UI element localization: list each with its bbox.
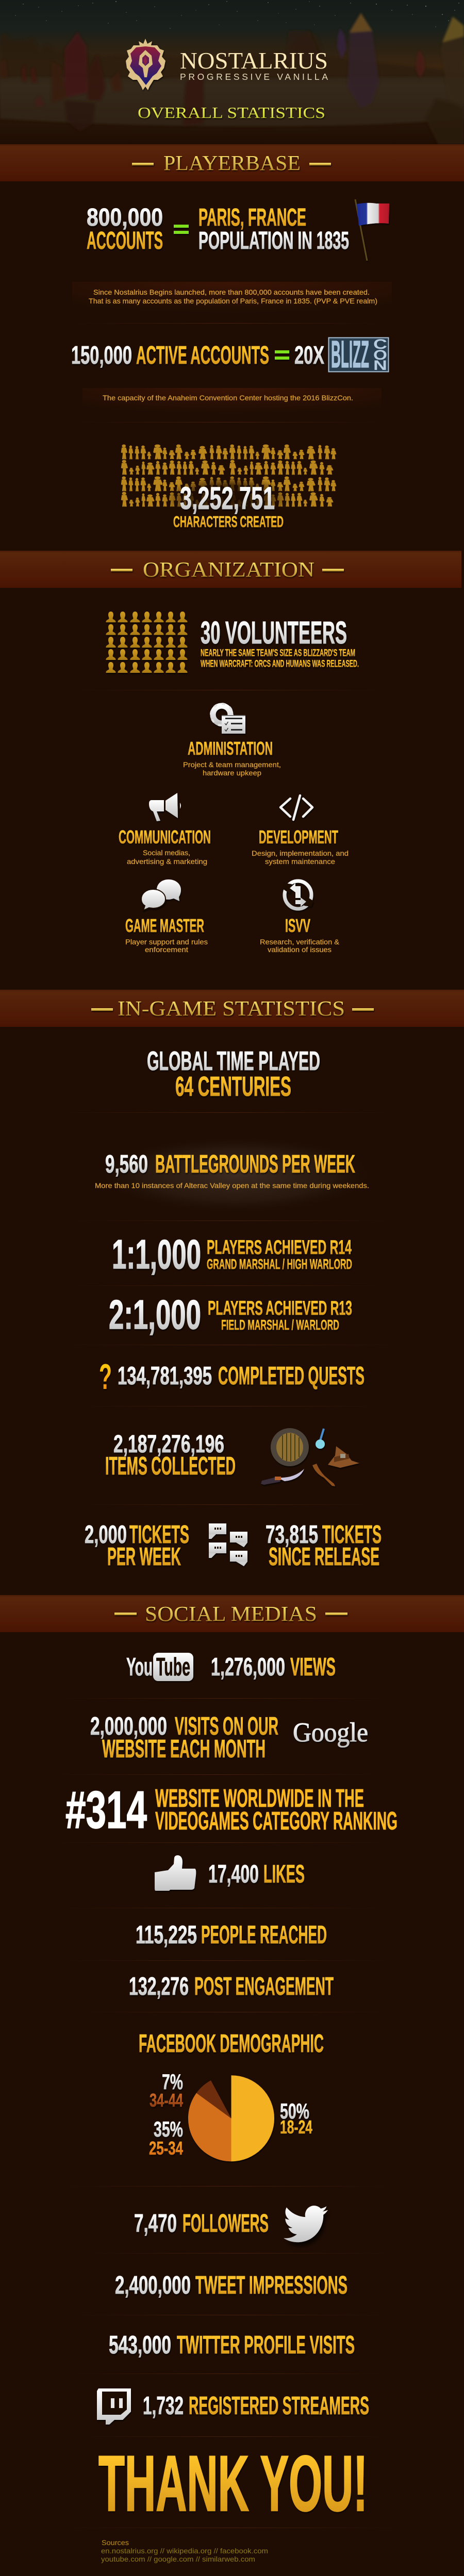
stat: registered streamers bbox=[143, 2392, 369, 2420]
icon: blizzcon logo: BLIZZ bbox=[331, 333, 369, 376]
legend: 18-24 bbox=[280, 2099, 312, 2138]
stat: twitter profile visits: 543,000 bbox=[109, 2331, 171, 2359]
text block: sources: youtube.com // google.com // similarweb.com bbox=[101, 2555, 255, 2563]
icon: quest mark: ? bbox=[99, 1357, 112, 1397]
logo: horde shield bbox=[126, 39, 165, 90]
legend: 34-44: 34-44 bbox=[150, 2090, 183, 2111]
icon: character silhouettes bbox=[121, 445, 336, 521]
role: administration bbox=[183, 704, 281, 777]
role: isvv: Research, verification & bbox=[260, 938, 340, 946]
stat: global time played: GLOBAL TIME PLAYED bbox=[147, 1046, 320, 1076]
panel: social medias bbox=[0, 1595, 464, 2437]
stat: accounts equals paris: POPULATION IN 1835 bbox=[198, 227, 349, 255]
legend: 25-34: 35% bbox=[154, 2117, 183, 2141]
stat: r13: 2:1,000 bbox=[109, 1292, 201, 1337]
stat: website visits bbox=[90, 1713, 278, 1763]
stat: tweet impressions bbox=[115, 2272, 347, 2299]
stat: accounts equals paris: PARIS, FRANCE bbox=[198, 204, 306, 231]
stat: youtube views: VIEWS bbox=[290, 1653, 336, 1681]
icon: code brackets bbox=[280, 795, 312, 820]
stat: tickets per week bbox=[85, 1521, 189, 1571]
text block: accounts note: Since Nostalrius Begins launched, more than 800,000 accounts have been created. bbox=[93, 288, 370, 296]
stat: website visits: 2,000,000 bbox=[90, 1713, 167, 1740]
stat: post engagement bbox=[129, 1973, 334, 2001]
section band: social medias: SOCIAL MEDIAS bbox=[145, 1602, 317, 1625]
role: development: Design, implementation, and bbox=[252, 849, 349, 857]
role: isvv: ISVV bbox=[285, 915, 310, 936]
stat: characters created: 3,252,751 bbox=[180, 481, 275, 516]
stat: twitter followers bbox=[134, 2210, 269, 2238]
stat: items collected: 2,187,276,196 bbox=[113, 1431, 224, 1458]
stat: tweet impressions: 2,400,000 bbox=[115, 2272, 191, 2299]
ground dunes bbox=[0, 77, 464, 126]
stat: tickets since release: 73,815 bbox=[266, 1521, 318, 1549]
stat: volunteers: 30 VOLUNTEERS bbox=[201, 615, 347, 650]
role: game master: Player support and rules bbox=[125, 938, 208, 946]
role: development bbox=[252, 795, 349, 866]
stat: r14: 1:1,000 bbox=[112, 1231, 201, 1277]
legend: 25-34 bbox=[149, 2117, 183, 2159]
icon: sync alert bbox=[283, 881, 313, 909]
legend: 18-24: 18-24 bbox=[280, 2116, 312, 2138]
stat: accounts equals paris: 800,000 bbox=[87, 204, 163, 231]
text block: sources: en.nostalrius.org // wikipedia.org // facebook.com bbox=[101, 2547, 268, 2555]
stat: tickets per week: PER WEEK bbox=[107, 1543, 181, 1571]
stat: post engagement: 132,276 bbox=[129, 1973, 189, 2001]
legend: 18-24: 50% bbox=[280, 2099, 309, 2123]
role: isvv bbox=[260, 881, 340, 954]
role: game master: GAME MASTER bbox=[125, 915, 204, 936]
panel: playerbase bbox=[0, 144, 464, 531]
stat: r14 bbox=[112, 1231, 352, 1277]
title: OVERALL STATISTICS bbox=[138, 104, 325, 122]
stat: completed quests: 134,781,395 bbox=[118, 1362, 212, 1390]
icon: blizzcon logo bbox=[329, 333, 389, 376]
stat: tickets since release bbox=[266, 1521, 382, 1571]
text block: accounts note bbox=[72, 282, 392, 323]
icon: loot items bbox=[261, 1428, 359, 1486]
stat: active accounts: ACTIVE ACCOUNTS bbox=[136, 342, 269, 369]
section band: organization bbox=[0, 551, 461, 588]
section band: in-game statistics: IN-GAME STATISTICS bbox=[118, 996, 345, 1020]
stat: twitter profile visits bbox=[109, 2331, 355, 2359]
icon: megaphone bbox=[149, 793, 181, 821]
section band: social medias bbox=[0, 1595, 464, 1632]
stat: characters created: CHARACTERS CREATED bbox=[173, 513, 284, 531]
stat: battlegrounds: 9,560 bbox=[105, 1150, 148, 1178]
icon: google wordmark: Google bbox=[293, 1718, 368, 1748]
role: communication: COMMUNICATION bbox=[119, 826, 211, 848]
text block: blizzcon note bbox=[82, 388, 382, 422]
section band: playerbase bbox=[0, 144, 464, 181]
stat: website visits: VISITS ON OUR bbox=[175, 1713, 278, 1740]
crystals left bbox=[0, 32, 123, 131]
stat: r13: PLAYERS ACHIEVED R13 bbox=[208, 1297, 352, 1319]
text block: accounts note: That is as many accounts as the population of Paris, France in 1835. (PVP & PVE realm) bbox=[89, 297, 377, 305]
icon: volunteers bbox=[106, 612, 188, 673]
legend: 25-34: 25-34 bbox=[149, 2138, 183, 2159]
panel: in-game statistics bbox=[0, 990, 464, 1571]
stat: likes: 17,400 bbox=[208, 1860, 259, 1888]
icon: chat bubbles bbox=[141, 879, 181, 910]
battle art backdrop bbox=[102, 1138, 370, 1212]
role: administration: hardware upkeep bbox=[203, 769, 261, 777]
stat: r14: PLAYERS ACHIEVED R14 bbox=[207, 1236, 352, 1259]
stat: volunteers bbox=[201, 615, 359, 670]
role: isvv: validation of issues bbox=[268, 945, 332, 954]
stat: r13 bbox=[109, 1292, 352, 1337]
text block: sources: Sources bbox=[102, 2538, 129, 2547]
role: game master: enforcement bbox=[145, 945, 188, 954]
pie chart: facebook demographic bbox=[149, 2070, 312, 2161]
icon: youtube logo: Tube bbox=[156, 1653, 190, 1681]
stat: accounts equals paris bbox=[87, 204, 349, 255]
role: development: system maintenance bbox=[265, 857, 335, 866]
icon: twitter bird bbox=[284, 2206, 328, 2242]
role: communication: Social medias, bbox=[143, 849, 190, 857]
stat: twitter followers: 7,470 bbox=[134, 2210, 177, 2238]
icon: gear and checklist bbox=[211, 704, 245, 734]
stat: completed quests bbox=[99, 1357, 364, 1397]
icon: thumbs up bbox=[155, 1855, 196, 1891]
stat: items collected: ITEMS COLLECTED bbox=[105, 1452, 236, 1480]
icon: blizzcon logo: N bbox=[373, 358, 387, 373]
stat: global time played: 64 CENTURIES bbox=[175, 1071, 291, 1102]
icon: twitch bbox=[97, 2388, 131, 2425]
logo wordmark: NOSTALRIUS bbox=[180, 47, 328, 74]
stat: tickets per week: 2,000 bbox=[85, 1521, 127, 1549]
stat: tweet impressions: TWEET IMPRESSIONS bbox=[195, 2272, 347, 2299]
stat: website rank bbox=[65, 1781, 397, 1839]
stat: active accounts: 150,000 bbox=[71, 342, 132, 369]
stat: people reached bbox=[136, 1921, 327, 1949]
text block: sources bbox=[101, 2538, 268, 2563]
stat: battlegrounds: More than 10 instances of Alterac Valley open at the same time during weekends. bbox=[95, 1181, 369, 1190]
legend: 34-44 bbox=[150, 2070, 183, 2111]
stat: items collected bbox=[105, 1431, 236, 1480]
crystals right bbox=[183, 13, 464, 144]
role: game master bbox=[125, 879, 208, 954]
section band: in-game statistics bbox=[0, 990, 464, 1027]
icon: blizzcon logo: O bbox=[373, 347, 387, 363]
stat: website visits: WEBSITE EACH MONTH bbox=[102, 1735, 266, 1763]
stat: active accounts bbox=[71, 342, 324, 369]
stat: post engagement: POST ENGAGEMENT bbox=[194, 1973, 334, 2001]
stat: global time played bbox=[147, 1046, 320, 1102]
stat: battlegrounds bbox=[95, 1138, 370, 1212]
stat: active accounts: 20X bbox=[294, 342, 324, 369]
role: administration: Project & team management, bbox=[183, 760, 281, 769]
stat: accounts equals paris: ACCOUNTS bbox=[87, 227, 163, 255]
stat: website rank: #314 bbox=[65, 1781, 147, 1839]
icon: youtube logo: You bbox=[126, 1653, 153, 1681]
tagline: PROGRESSIVE VANILLA bbox=[180, 72, 328, 82]
section band: playerbase: PLAYERBASE bbox=[163, 151, 301, 175]
stat: twitter followers: FOLLOWERS bbox=[183, 2210, 269, 2238]
stat: characters created bbox=[121, 445, 336, 531]
stat: registered streamers: 1,732 bbox=[143, 2392, 184, 2420]
stat: people reached: PEOPLE REACHED bbox=[201, 1921, 327, 1949]
icon: french flag bbox=[355, 199, 389, 261]
icon: youtube logo bbox=[126, 1653, 193, 1681]
role: communication bbox=[119, 793, 211, 866]
stat: tickets since release: TICKETS bbox=[322, 1521, 382, 1549]
stat: r13: FIELD MARSHAL / WARLORD bbox=[221, 1317, 339, 1333]
role: development: DEVELOPMENT bbox=[259, 826, 338, 848]
stars bbox=[15, 1, 459, 29]
stat: youtube views: 1,276,000 bbox=[211, 1653, 285, 1681]
legend: 34-44: 7% bbox=[162, 2070, 183, 2094]
text block: blizzcon note: The capacity of the Anaheim Convention Center hosting the 2016 BlizzCon. bbox=[103, 394, 353, 402]
stat: volunteers: NEARLY THE SAME TEAM'S SIZE AS BLIZZARD'S TEAM bbox=[201, 648, 355, 658]
stat: likes: LIKES bbox=[263, 1860, 305, 1888]
section band: organization: ORGANIZATION bbox=[143, 557, 314, 581]
distant mountains bbox=[0, 31, 464, 82]
role: communication: advertising & marketing bbox=[127, 857, 207, 866]
stat: tickets per week: TICKETS bbox=[129, 1521, 189, 1549]
icon: ticket bubbles bbox=[209, 1523, 247, 1566]
stat: people reached: 115,225 bbox=[136, 1921, 197, 1949]
icon: blizzcon logo: C bbox=[373, 336, 387, 352]
stat: r14: GRAND MARSHAL / HIGH WARLORD bbox=[207, 1256, 352, 1272]
panel: header scene bbox=[0, 0, 464, 144]
role: administration: ADMINISTATION bbox=[188, 738, 273, 759]
panel: organization bbox=[0, 551, 461, 954]
